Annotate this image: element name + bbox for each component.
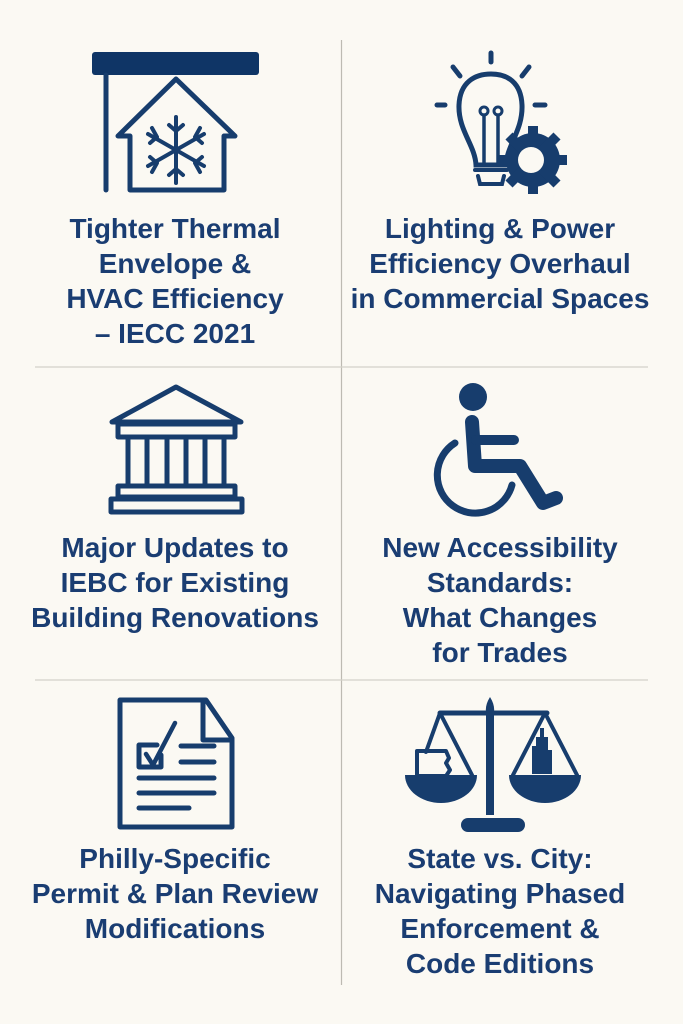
- heading: thermal envelope: [66, 213, 284, 349]
- icon: lightbulb with gear: [437, 53, 567, 194]
- heading: IEBC: IEBC for Existing: [61, 567, 289, 598]
- heading: accessibility: What Changes: [403, 602, 597, 633]
- heading: accessibility: for Trades: [432, 637, 568, 668]
- heading: thermal envelope: Tighter Thermal: [69, 213, 281, 244]
- heading: accessibility: Standards:: [427, 567, 573, 598]
- heading: accessibility: New Accessibility: [382, 532, 618, 563]
- heading: permit: Modifications: [85, 913, 265, 944]
- heading: lighting: Lighting & Power: [385, 213, 615, 244]
- heading: permit: Permit & Plan Review: [32, 878, 318, 909]
- heading: permit: Philly-Specific: [79, 843, 271, 874]
- heading: thermal envelope: Envelope &: [99, 248, 251, 279]
- heading: state vs city: Code Editions: [406, 948, 594, 979]
- heading: lighting: Efficiency Overhaul: [369, 248, 631, 279]
- heading: IEBC: Major Updates to: [61, 532, 289, 563]
- icon: house with snowflake: [92, 52, 259, 190]
- heading: lighting: [351, 213, 649, 314]
- heading: IEBC: [31, 532, 319, 633]
- heading: thermal envelope: HVAC Efficiency: [66, 283, 284, 314]
- icon: balance scale: [405, 697, 581, 832]
- heading: state vs city: State vs. City:: [407, 843, 593, 874]
- heading: IEBC: Building Renovations: [31, 602, 319, 633]
- icon: classical building: [111, 387, 242, 512]
- heading: lighting: in Commercial Spaces: [351, 283, 649, 314]
- heading: thermal envelope: – IECC 2021: [95, 318, 255, 349]
- heading: state vs city: Enforcement &: [400, 913, 600, 944]
- icon: checklist document: [120, 700, 232, 827]
- heading: state vs city: [375, 843, 625, 979]
- heading: permit: [32, 843, 318, 944]
- heading: state vs city: Navigating Phased: [375, 878, 625, 909]
- heading: accessibility: [382, 532, 618, 668]
- icon: wheelchair: [437, 383, 556, 513]
